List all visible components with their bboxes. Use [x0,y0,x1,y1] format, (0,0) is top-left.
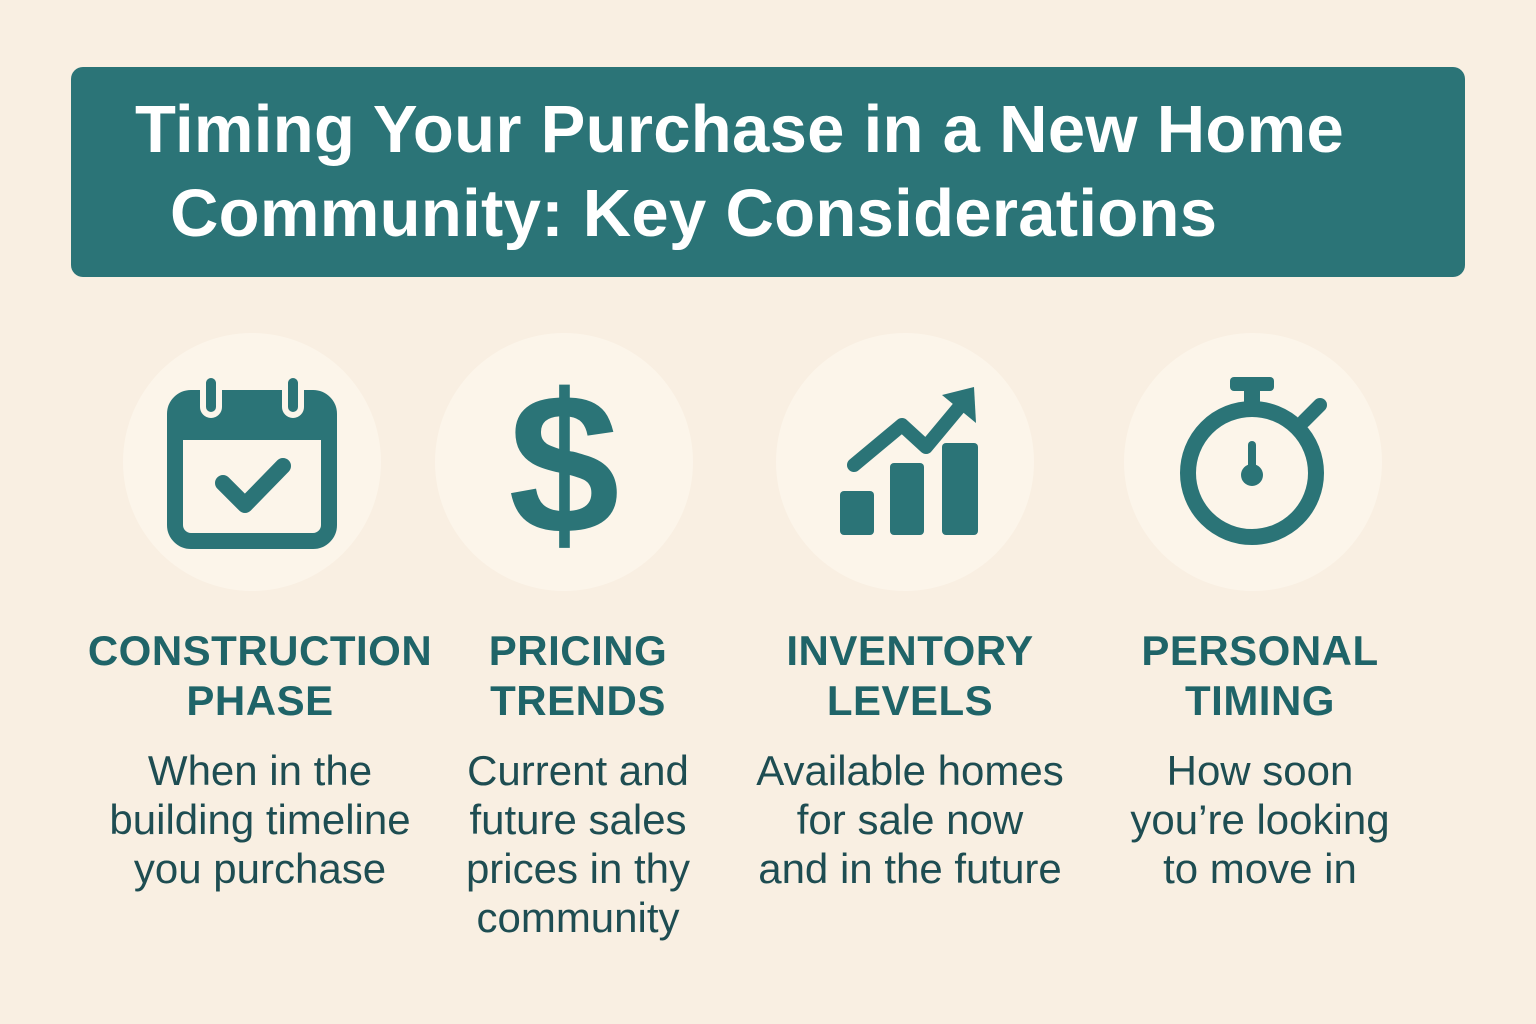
column: pricing trends: PRICING [489,627,667,674]
title banner [71,67,1465,277]
column: construction phase [88,627,432,892]
column: pricing trends: prices in thy [466,845,690,892]
column: personal timing: to move in [1163,845,1357,892]
column: inventory levels: INVENTORY [786,627,1034,674]
column: personal timing [1130,627,1390,892]
icon: chart [776,333,1034,591]
column: personal timing: you’re looking [1130,796,1390,843]
icon: stopwatch [1124,333,1382,591]
icon: dollar: $ [508,353,620,576]
column: construction phase: When in the [148,747,372,794]
column: construction phase: CONSTRUCTION [88,627,432,674]
column: inventory levels: Available homes [756,747,1064,794]
column: pricing trends: Current and [467,747,689,794]
icon: dollar [435,333,693,591]
title [135,92,1344,251]
column: pricing trends: TRENDS [490,677,666,724]
column: construction phase: you purchase [134,845,386,892]
title: Timing Your Purchase in a New Home [135,92,1344,167]
column: inventory levels: LEVELS [827,677,993,724]
column: inventory levels: and in the future [758,845,1062,892]
column: inventory levels: for sale now [797,796,1023,843]
column: personal timing: PERSONAL [1141,627,1379,674]
column: inventory levels [756,627,1064,892]
column: construction phase: PHASE [186,677,334,724]
column: personal timing: How soon [1167,747,1353,794]
icon: calendar [123,333,381,591]
column: construction phase: building timeline [109,796,411,843]
column: pricing trends: community [476,894,680,941]
title: Community: Key Considerations [170,176,1217,251]
column: personal timing: TIMING [1185,677,1335,724]
column: pricing trends: future sales [469,796,687,843]
column: pricing trends [466,627,690,941]
